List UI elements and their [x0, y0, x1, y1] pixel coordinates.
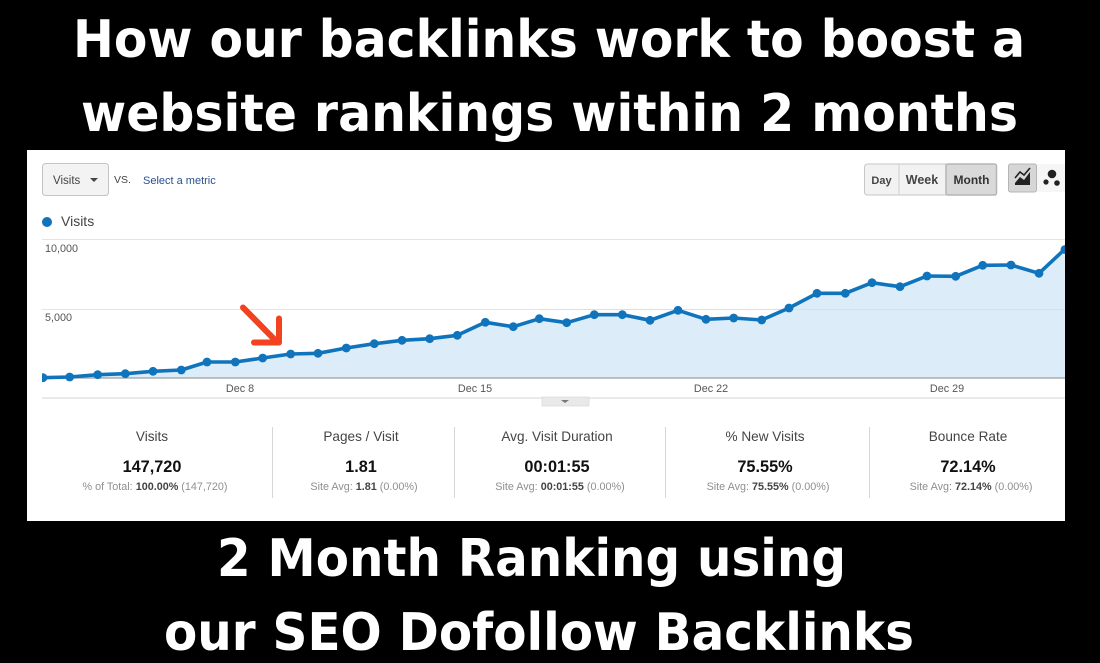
title: [73, 10, 1025, 144]
footer heading: [164, 529, 914, 663]
visits line: [42, 249, 1065, 378]
line chart: 10,000: [45, 243, 78, 255]
stat: average visit duration: Site Avg: 00:01:55 (0.00%): [495, 481, 625, 493]
stat: bounce rate: Bounce Rate: [929, 429, 1007, 444]
title: website rankings within 2 months: [81, 84, 1018, 144]
stat: average visit duration: [495, 429, 625, 493]
x axis labels: Dec 29: [930, 383, 964, 395]
stat: new visits: [707, 429, 829, 493]
stat: pages per visit: [310, 429, 418, 493]
vs select a metric: Select a metric: [143, 175, 216, 187]
stat: visits: [82, 429, 228, 493]
metric dropdown: [42, 164, 108, 196]
legend: [42, 213, 94, 229]
line chart: [39, 240, 1069, 395]
stat dividers: [272, 427, 870, 498]
chart type toggle icons: [1008, 164, 1065, 192]
stat: bounce rate: Site Avg: 72.14% (0.00%): [910, 481, 1032, 493]
stat: visits: 147,720: [123, 458, 181, 476]
stat: pages per visit: Site Avg: 1.81 (0.00%): [310, 481, 418, 493]
stat: bounce rate: [910, 429, 1032, 493]
arrow: red marker: [243, 308, 279, 342]
stat: new visits: 75.55%: [737, 458, 793, 476]
data points: [39, 245, 1069, 382]
legend: Visits: [61, 213, 94, 229]
stat: pages per visit: Pages / Visit: [323, 429, 399, 444]
stat: visits: Visits: [136, 429, 168, 444]
stat: average visit duration: 00:01:55: [524, 458, 590, 476]
vs select a metric: VS.: [114, 174, 131, 186]
stat: average visit duration: Avg. Visit Duration: [501, 429, 613, 444]
footer heading: 2 Month Ranking using: [217, 529, 846, 589]
line chart: 5,000: [45, 312, 72, 324]
stat: bounce rate: 72.14%: [940, 458, 996, 476]
stat: new visits: Site Avg: 75.55% (0.00%): [707, 481, 829, 493]
panel: analytics screenshot: [27, 150, 1069, 521]
stat: visits: % of Total: 100.00% (147,720): [82, 481, 228, 493]
divider with collapse tab: [42, 397, 1065, 406]
stat: pages per visit: 1.81: [345, 458, 377, 476]
time range buttons: [864, 164, 996, 195]
stat: new visits: % New Visits: [725, 429, 805, 444]
area fill: [42, 249, 1065, 378]
time range buttons: Month: [954, 173, 989, 187]
title: How our backlinks work to boost a: [73, 10, 1025, 70]
x axis labels: Dec 22: [694, 383, 728, 395]
metric dropdown: Visits: [53, 175, 81, 187]
time range buttons: Day: [871, 175, 892, 187]
footer heading: our SEO Dofollow Backlinks: [164, 603, 914, 663]
x axis labels: Dec 8: [226, 383, 254, 395]
vs select a metric: [114, 174, 216, 187]
time range buttons: Week: [906, 173, 938, 187]
x axis labels: Dec 15: [458, 383, 492, 395]
x axis labels: [226, 384, 964, 392]
